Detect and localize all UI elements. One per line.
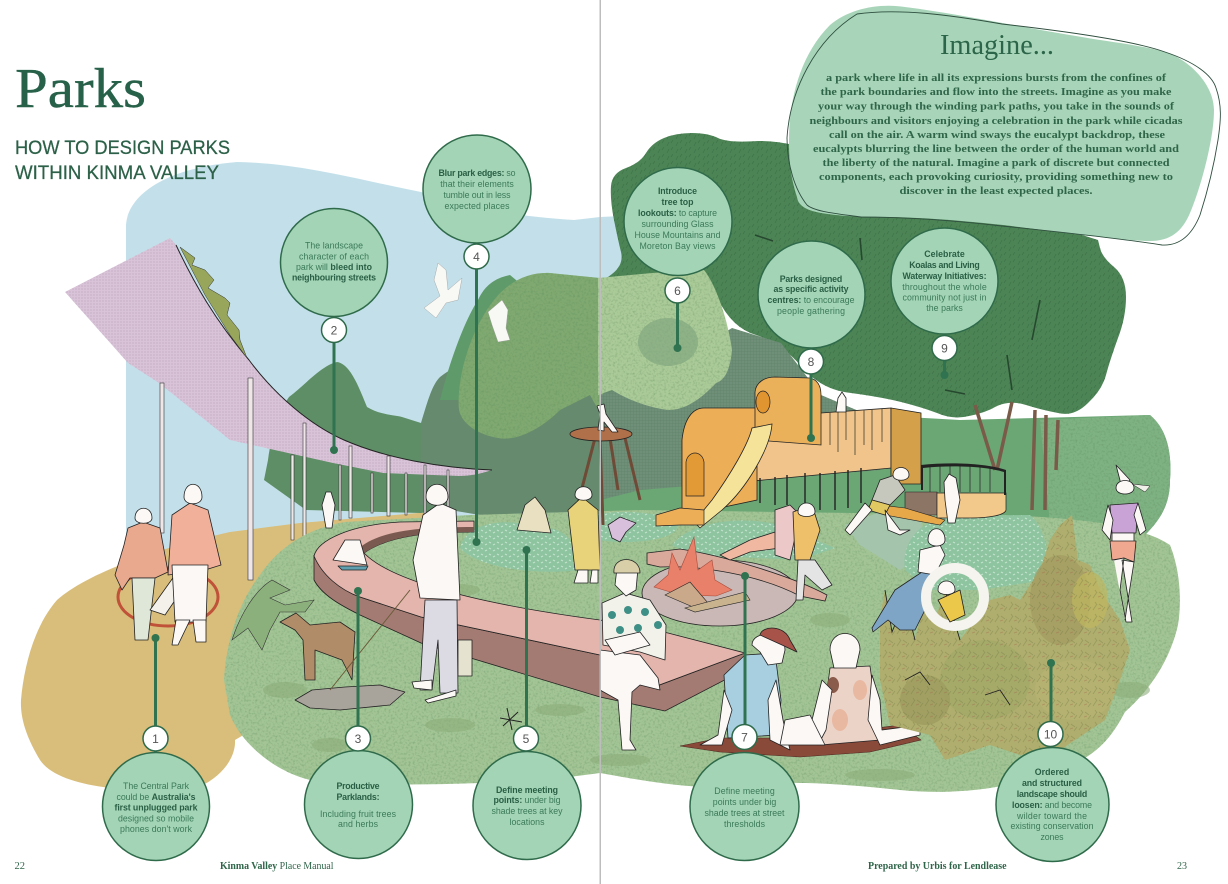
callout 8: activity centres: centres: to encourage xyxy=(768,295,855,305)
centre fold line xyxy=(600,0,601,884)
tree: large dark canopy xyxy=(600,133,1126,417)
curved bench xyxy=(647,549,827,601)
callout 6: tree top lookouts: Introduce xyxy=(658,186,697,196)
raised platform xyxy=(937,493,1006,518)
title: Parks xyxy=(15,58,146,120)
callout 6: tree top lookouts: tree top xyxy=(662,197,694,207)
callout 9: koalas and waterways: community not just in xyxy=(902,292,987,302)
steps xyxy=(905,492,937,515)
callout 5: define meeting points: 5 xyxy=(523,732,530,746)
callout 4: blur park edges: that their elements xyxy=(440,179,514,189)
callout 6: tree top lookouts: lookouts: to capture xyxy=(638,208,717,218)
tower window xyxy=(756,391,770,413)
woman xyxy=(115,522,168,590)
callout 10: wilder landscape: existing conservation xyxy=(1010,821,1094,831)
footer: left page xyxy=(14,861,334,872)
callout 9: koalas and waterways: 9 xyxy=(941,342,948,356)
jogger xyxy=(1102,465,1150,622)
callout 10: wilder landscape: and structured xyxy=(1022,778,1082,788)
subtitle xyxy=(15,138,230,184)
shopping bag xyxy=(458,640,472,676)
callout 4: blur park edges: tumble out in less xyxy=(444,190,511,200)
ground: main lawn xyxy=(224,510,1180,792)
footer: right page: Prepared by Urbis for Lendlease xyxy=(868,861,1007,872)
white ring swing xyxy=(926,568,984,626)
callout 5: define meeting points: shade trees at key xyxy=(492,806,563,816)
fire pit xyxy=(642,537,827,626)
distant figure xyxy=(322,492,335,528)
dog lying down xyxy=(295,685,405,710)
callout 9: koalas and waterways: Koalas and Living xyxy=(909,260,980,270)
text block: Imagine narrative xyxy=(810,72,1183,197)
callout 3: productive parklands: Productive xyxy=(336,781,380,791)
text block: Imagine narrative: call on the air. A warm wind sways the eucalypt backdrop, these xyxy=(829,129,1165,141)
callout 10: wilder landscape: zones xyxy=(1040,832,1064,842)
callout 6: tree top lookouts: 6 xyxy=(674,284,681,298)
callout 6: tree top lookouts: Moreton Bay views xyxy=(640,241,716,251)
callout 1: unplugged park: could be Australia's xyxy=(116,792,196,802)
trunks xyxy=(975,402,1058,510)
side face xyxy=(314,555,745,711)
text block: Imagine narrative: components, each provoking curiosity, providing something new to xyxy=(819,171,1174,183)
callout 1: unplugged park: designed so mobile xyxy=(118,814,194,824)
playground structure xyxy=(656,377,1006,528)
text block: Imagine narrative: discover in the least expected places. xyxy=(900,185,1093,197)
callout 7: street thresholds: thresholds xyxy=(724,819,766,829)
callout 8: activity centres: Parks designed xyxy=(780,274,842,284)
red hoop xyxy=(118,568,218,626)
flames xyxy=(654,537,732,596)
beanie xyxy=(614,560,640,573)
wooden fence deck xyxy=(740,408,891,481)
callout 9: koalas and waterways: throughout the whole xyxy=(902,282,987,292)
callout 8: activity centres: 8 xyxy=(808,355,815,369)
tree: low left xyxy=(264,362,509,513)
callout 2: bleed into neighbouring streets: neighbouring streets xyxy=(292,272,376,282)
woman in yellow dress xyxy=(568,497,600,570)
woman in patterned top xyxy=(780,634,920,745)
person reading on bench xyxy=(600,560,666,750)
footer: left page: Kinma Valley Place Manual xyxy=(220,861,334,872)
seated girl xyxy=(517,497,551,533)
text block: Imagine narrative: neighbours and visitors enjoying a celebration in the park while cicadas xyxy=(810,115,1183,127)
callout 10: wilder landscape xyxy=(996,659,1109,862)
right shrub xyxy=(1040,415,1170,535)
leaf marks xyxy=(755,235,1040,394)
figure on top xyxy=(836,392,846,412)
callout 4: blur park edges: expected places xyxy=(444,201,510,211)
tree: light canopy xyxy=(598,270,732,410)
callout 5: define meeting points: locations xyxy=(510,817,545,827)
subtitle: WITHIN KINMA VALLEY xyxy=(15,163,219,184)
posts under deck xyxy=(760,468,861,510)
man xyxy=(168,503,221,575)
callout 6: tree top lookouts: surrounding Glass xyxy=(642,219,714,229)
subtitle: HOW TO DESIGN PARKS xyxy=(15,138,230,159)
child on mound xyxy=(608,517,636,542)
picnic blanket xyxy=(680,725,921,757)
text block: Imagine narrative: eucalypts blurring the line between the order of the human world and xyxy=(813,143,1179,155)
wild planting bush xyxy=(880,515,1130,760)
man in white jacket xyxy=(330,484,472,703)
callout 2: bleed into neighbouring streets xyxy=(280,208,388,454)
callout 3: productive parklands: 3 xyxy=(355,732,362,746)
man in blue shirt and cap xyxy=(700,628,797,750)
icon: dragonfly xyxy=(500,708,522,730)
callout 7: street thresholds xyxy=(690,572,799,860)
black railing xyxy=(921,463,1006,495)
callout 5: define meeting points: Define meeting xyxy=(496,785,558,795)
text block: Imagine narrative: a park where life in all its expressions bursts from the confines of xyxy=(826,72,1166,84)
canopy posts xyxy=(160,378,449,580)
tower xyxy=(755,377,821,445)
callout 2: bleed into neighbouring streets: park will bleed into xyxy=(296,262,373,272)
heading: Imagine: Imagine... xyxy=(940,30,1054,61)
lower orange steps xyxy=(656,508,704,526)
mounds: planted meeting spaces xyxy=(460,512,1047,590)
callout 4: blur park edges xyxy=(423,135,531,546)
dog on lead xyxy=(280,613,355,680)
icon: white birds xyxy=(424,263,510,342)
text block: Imagine narrative: your way through the winding park paths, you take in the sounds of xyxy=(818,100,1174,112)
callout 6: tree top lookouts: House Mountains and xyxy=(634,230,721,240)
callout 10: wilder landscape: Ordered xyxy=(1035,767,1069,777)
people: couple walking xyxy=(115,484,221,645)
panel: Imagine speech bubble xyxy=(787,6,1220,245)
callout 6: tree top lookouts xyxy=(624,168,732,352)
callout 9: koalas and waterways: the parks xyxy=(926,303,963,313)
child on steps xyxy=(944,474,960,523)
top face xyxy=(314,521,745,687)
tree: grey-green behind playground xyxy=(600,328,880,500)
child in ring xyxy=(938,590,965,622)
callout 10: wilder landscape: wilder toward the xyxy=(1016,811,1087,821)
scene: trees left page xyxy=(264,273,640,515)
tree shadow on lawn xyxy=(232,580,314,650)
person with tablet on bench xyxy=(333,540,368,570)
callout 10: wilder landscape: loosen: and become xyxy=(1012,800,1092,810)
logs xyxy=(665,582,708,610)
tree: mottled shade xyxy=(638,318,698,366)
figure on lookout xyxy=(597,404,618,432)
callout 5: define meeting points: points: under big xyxy=(494,795,561,805)
green roof xyxy=(180,247,247,358)
tree: mottled canopy xyxy=(459,273,604,439)
callout 1: unplugged park xyxy=(102,634,210,860)
fence slats xyxy=(830,409,882,455)
callout 7: street thresholds: 7 xyxy=(741,730,748,744)
treehouse lookout xyxy=(570,404,640,525)
callout 2: bleed into neighbouring streets: 2 xyxy=(331,324,338,338)
callout 4: blur park edges: Blur park edges: so xyxy=(438,168,516,178)
callout 8: activity centres: as specific activity xyxy=(774,284,849,294)
callout 7: street thresholds: shade trees at street xyxy=(704,808,785,818)
callout 3: productive parklands: Including fruit trees xyxy=(320,809,397,819)
people: seated and standing by the mound xyxy=(517,487,636,583)
inner wall xyxy=(358,527,474,553)
callout 1: unplugged park: first unplugged park xyxy=(114,802,198,812)
callout 9: koalas and waterways: Celebrate xyxy=(924,249,965,259)
canopy: shade sail xyxy=(65,238,492,476)
ring bench xyxy=(314,521,745,711)
callout 1: unplugged park: phones don't work xyxy=(120,824,193,834)
footer: right page: 23 xyxy=(1177,861,1187,872)
callout 2: bleed into neighbouring streets: character of each xyxy=(299,252,369,262)
footer: right page xyxy=(868,861,1187,872)
scene: trees right page xyxy=(598,133,1170,535)
callout 3: productive parklands: and herbs xyxy=(338,819,379,829)
text block: Imagine narrative: the park boundaries and flow into the streets. Imagine as you make xyxy=(820,86,1172,98)
footer: left page: 22 xyxy=(14,861,25,872)
callout 1: unplugged park: The Central Park xyxy=(123,781,190,791)
tree: grey-green behind xyxy=(420,364,640,515)
white bag xyxy=(150,575,182,615)
background: sky xyxy=(126,162,622,563)
callout 5: define meeting points xyxy=(473,546,581,860)
callout 3: productive parklands xyxy=(304,587,412,858)
side block xyxy=(891,408,921,484)
ground: grass tufts xyxy=(263,584,1150,781)
tree: mid green behind canopy xyxy=(440,275,540,400)
callout 2: bleed into neighbouring streets: The landscape xyxy=(305,240,363,250)
barrel body xyxy=(682,408,757,510)
callout 1: unplugged park: 1 xyxy=(152,732,159,746)
text block: Imagine narrative: the liberty of the natural. Imagine a park of discrete but connected xyxy=(822,157,1170,169)
callout 8: activity centres: people gathering xyxy=(777,306,845,316)
callout 9: koalas and waterways xyxy=(891,228,998,379)
runner xyxy=(845,468,910,535)
callout 10: wilder landscape: landscape should xyxy=(1017,789,1087,799)
arch door xyxy=(686,453,704,496)
foliage band behind playground xyxy=(600,400,1170,535)
callout 7: street thresholds: Define meeting xyxy=(714,786,775,796)
boy pushing ring xyxy=(872,529,984,632)
callout 3: productive parklands: Parklands: xyxy=(336,792,380,802)
people: sitting couple on bench xyxy=(720,503,832,600)
callout 4: blur park edges: 4 xyxy=(473,250,480,264)
callout 7: street thresholds: points under big xyxy=(713,797,776,807)
callout 9: koalas and waterways: Waterway Initiatives: xyxy=(902,271,987,281)
callout 8: activity centres xyxy=(758,241,865,442)
yellow slide xyxy=(694,424,772,528)
background: sand path xyxy=(21,512,470,791)
callout 10: wilder landscape: 10 xyxy=(1044,728,1057,742)
